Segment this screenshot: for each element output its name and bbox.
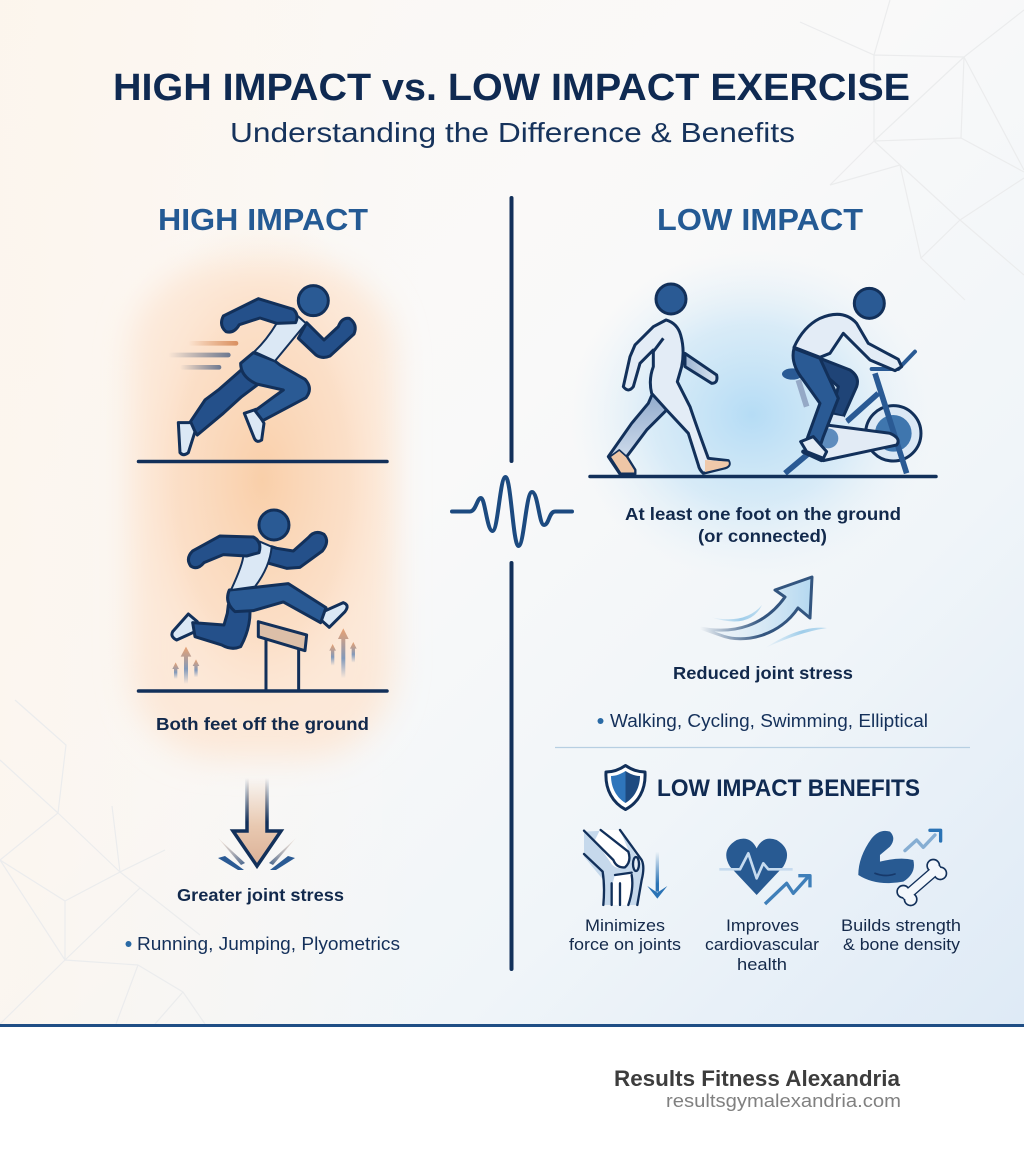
caption: improves cardiovascular health: health [737,955,787,974]
footer [0,1024,1024,1154]
caption: or connected: (or connected) [698,526,827,546]
caption: reduced joint stress: Reduced joint stress [673,663,853,683]
icon: walker [608,284,729,474]
icon: shield [606,766,645,810]
caption: at least one foot on the ground: At least one foot on the ground [625,504,901,524]
ground line: hurdler [138,689,387,693]
icon: hurdler [172,510,347,690]
caption: builds strength and bone density: & bone density [843,935,961,954]
heading: high impact: HIGH IMPACT [158,202,368,237]
icon: muscle and bone [858,830,946,905]
blue glow: low impact [570,250,934,580]
icon: knee joint [584,830,667,905]
icon: rising force arrows [172,628,357,684]
caption: improves cardiovascular health: Improves [726,916,799,935]
caption: both feet off the ground: Both feet off the ground [156,714,369,734]
caption: minimizes force on joints [569,916,681,954]
icon: heart with pulse [719,839,810,904]
subtitle: Understanding the Difference & Benefits [230,117,795,148]
caption: builds strength and bone density [841,916,961,954]
panel: low impact benefits [569,766,961,974]
center divider [510,198,514,969]
caption: improves cardiovascular health [705,916,819,974]
heading: low impact benefits: LOW IMPACT BENEFITS [657,775,920,802]
icon: upward swoosh arrow [700,577,827,648]
list: high impact examples: Running, Jumping, Plyometrics [137,934,400,954]
ground line: low impact [590,475,936,478]
heading: low impact: LOW IMPACT [657,202,863,237]
title: HIGH IMPACT vs. LOW IMPACT EXERCISE [113,67,910,109]
footer brand name: Results Fitness Alexandria [614,1066,901,1091]
icon: downward force arrow [218,778,296,870]
ground line: sprinter [138,460,387,463]
caption: improves cardiovascular health: cardiovascular [705,935,819,954]
caption: minimizes force on joints: Minimizes [585,916,665,935]
caption: builds strength and bone density: Builds strength [841,916,961,935]
caption: greater joint stress: Greater joint stress [177,885,344,905]
orange glow: high impact [117,210,407,758]
icon: stationary cyclist [782,288,921,473]
panel: high impact [126,202,400,954]
icon: sprinter [168,286,355,455]
footer website: resultsgymalexandria.com [666,1091,901,1111]
icon: pulse wave [452,477,572,546]
list: low impact examples: Walking, Cycling, Swimming, Elliptical [610,711,928,731]
panel: low impact [555,202,970,974]
caption: minimizes force on joints: force on joints [569,935,681,954]
